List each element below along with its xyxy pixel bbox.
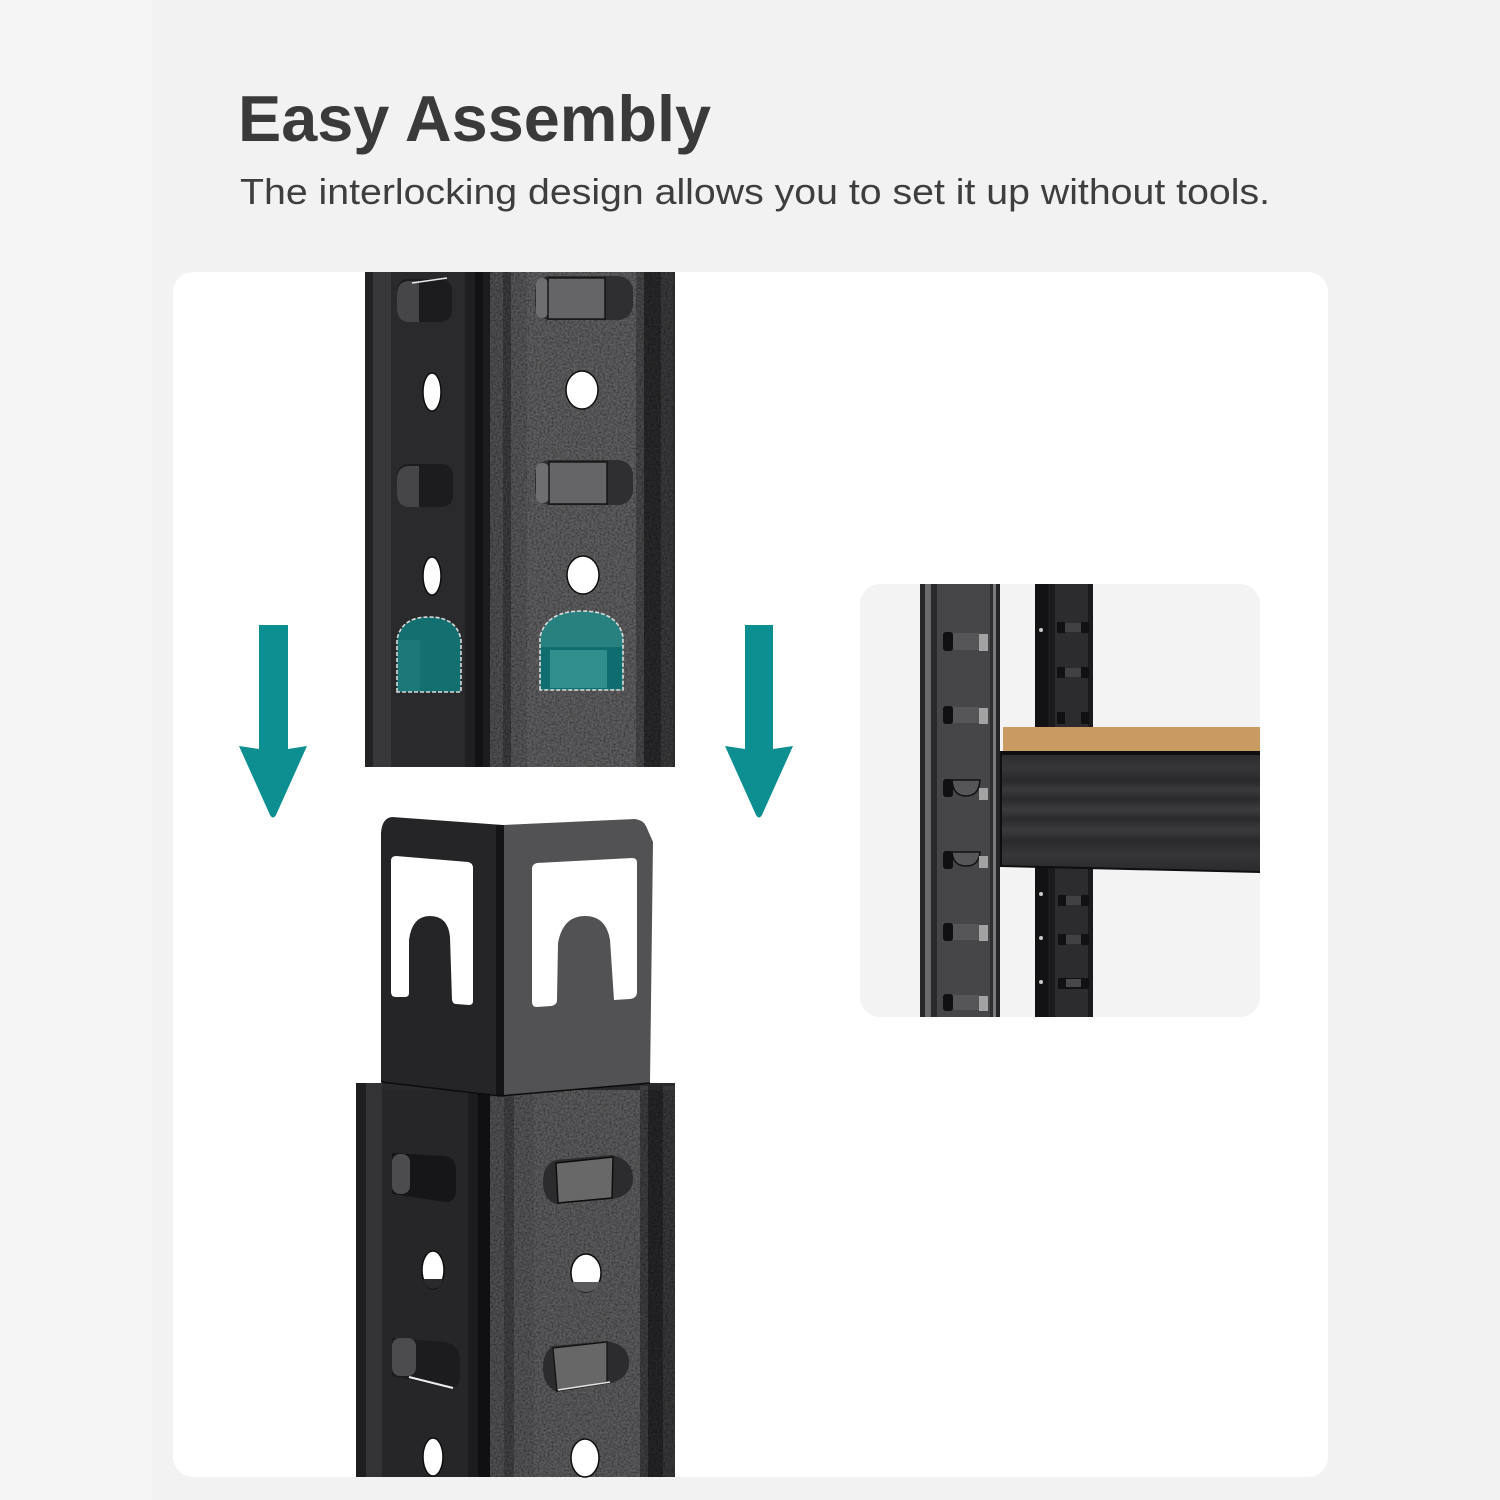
rear upright [1035, 584, 1093, 1017]
upper post slots left [397, 278, 453, 507]
panel: white card [173, 272, 1328, 1477]
lower post slots right [543, 1155, 633, 1392]
arrow: left down [239, 625, 307, 818]
teal hook markers [397, 611, 623, 692]
shelf board [1000, 727, 1260, 873]
lower post body [356, 1083, 675, 1477]
connector tab [381, 817, 653, 1096]
title: Easy Assembly [238, 82, 711, 155]
lower post holes [422, 1251, 601, 1477]
upper post [365, 272, 675, 767]
subtitle: The interlocking design allows you to set it up without tools. [240, 171, 1270, 212]
lower post slots left [392, 1153, 460, 1388]
lower post [356, 817, 675, 1477]
arrow: right down [725, 625, 793, 818]
inset photo: shelf detail [860, 584, 1260, 1017]
upper post slots right [535, 276, 633, 505]
front upright [920, 584, 1000, 1017]
upper post holes [423, 371, 599, 595]
